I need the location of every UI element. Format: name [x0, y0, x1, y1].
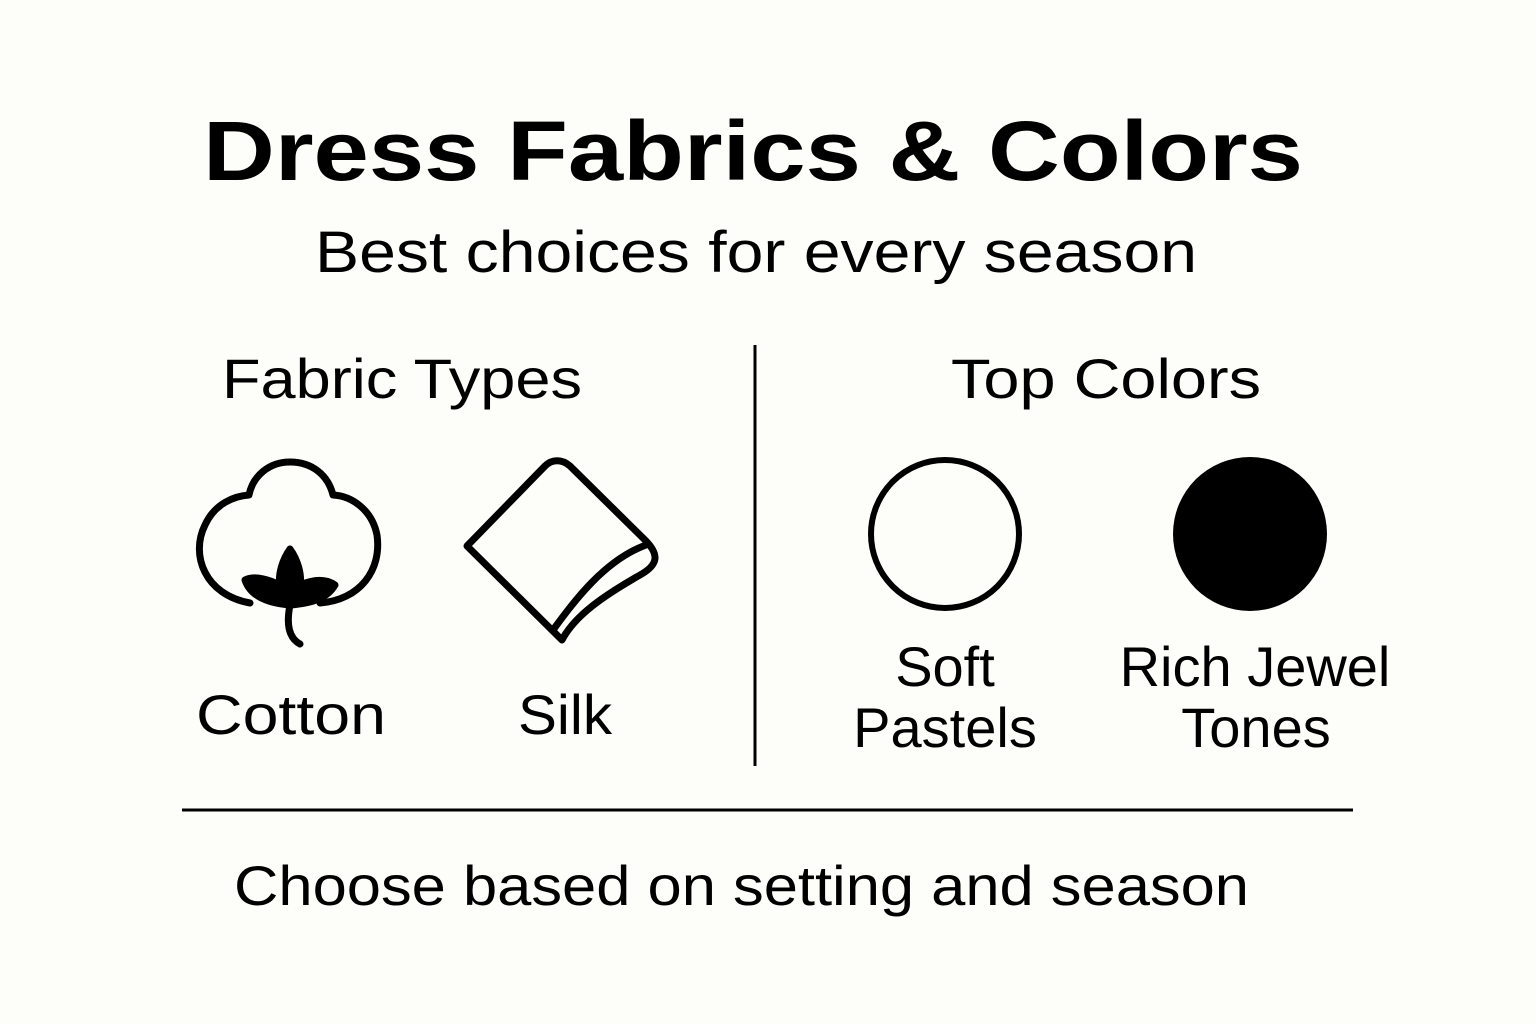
icon: cotton [199, 462, 378, 644]
icon: silk [467, 461, 655, 640]
title: Dress Fabrics & Colors [203, 104, 1303, 198]
label: Soft Pastels: Soft [895, 635, 995, 698]
footer text: Choose based on setting and season [234, 854, 1249, 917]
icon: soft pastels circle [871, 460, 1019, 608]
vertical divider [754, 345, 756, 766]
label: Cotton: Cotton [196, 683, 386, 746]
subtitle: Best choices for every season [315, 220, 1197, 285]
icon: rich jewel tones circle [1173, 457, 1327, 611]
panel: fabric types [196, 347, 655, 746]
label: Soft Pastels: Pastels [853, 696, 1037, 759]
heading: Fabric Types: Fabric Types [222, 347, 582, 410]
horizontal divider [182, 808, 1353, 812]
panel: top colors [853, 347, 1390, 759]
label: Silk: Silk [518, 683, 613, 746]
label: Rich Jewel Tones: Rich Jewel [1120, 635, 1390, 698]
heading: Top Colors: Top Colors [951, 347, 1261, 410]
label: Rich Jewel Tones: Tones [1181, 696, 1331, 759]
